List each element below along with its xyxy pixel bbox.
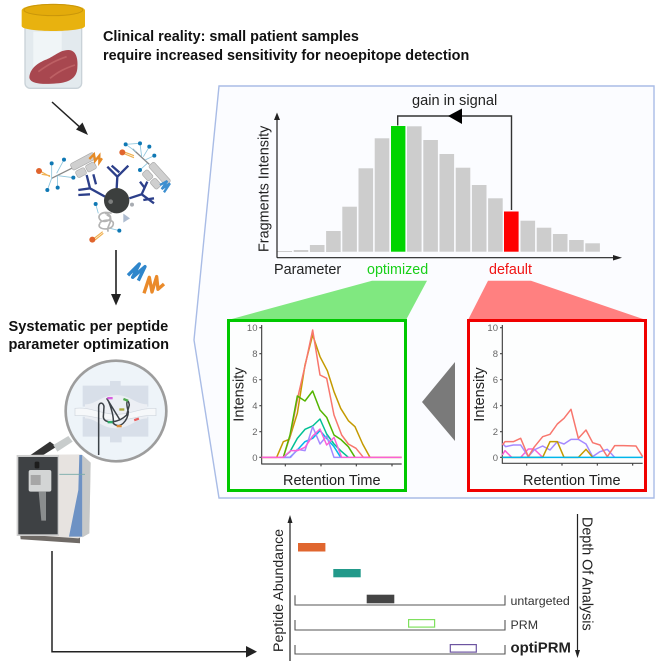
label default: default (489, 262, 532, 278)
peptide bar light green outline (409, 620, 435, 627)
icon: specimen jar with tissue (22, 4, 85, 88)
icon: magnifier with ion trap (66, 361, 166, 461)
peptide bar teal (333, 569, 361, 577)
abundance axis (288, 515, 292, 661)
label optiPRM: optiPRM (510, 640, 571, 656)
axis title: intensity: Intensity (472, 367, 488, 422)
arrow: beads to optimization (111, 250, 121, 306)
heading: clinical reality: require increased sensitivity for neoepitope detection (103, 48, 469, 64)
arrow: default to optimized comparison (422, 362, 455, 441)
heading: systematic optimization (8, 319, 169, 353)
optimized bar (391, 126, 405, 252)
peptide bar purple outline (450, 645, 476, 652)
panel: default chromatogram: 2 (493, 427, 498, 438)
label optimized: optimized (367, 262, 428, 278)
peptide bar dark (367, 595, 394, 603)
panel: default chromatogram: 8 (493, 349, 498, 360)
arrow: gain in signal (398, 108, 512, 210)
line chart: default traces (500, 325, 643, 466)
panel: optimized chromatogram: 10 (247, 323, 258, 334)
line chart: optimized traces (259, 325, 402, 466)
panel: optimization background (194, 86, 654, 498)
chart axes (274, 112, 622, 260)
bracket: untargeted (295, 595, 505, 605)
panel: optimized chromatogram: 2 (252, 427, 258, 438)
zoom wedge: optimized (228, 281, 427, 320)
bar chart: fragment intensity vs parameter (256, 93, 622, 278)
panel: default chromatogram (468, 320, 646, 490)
panel: default chromatogram: 10 (487, 323, 498, 334)
x axis title: Parameter (274, 262, 341, 278)
default bar (504, 212, 519, 252)
zoom wedge: default (468, 281, 646, 320)
panel: optimized chromatogram: 8 (252, 349, 258, 360)
depth axis (575, 514, 580, 658)
panel: optimized chromatogram: 0 (252, 453, 258, 464)
heading: systematic optimization: Systematic per peptide (8, 319, 168, 335)
axis title: retention time: Retention Time (523, 473, 621, 489)
label PRM: PRM (510, 618, 538, 632)
panel: optimized chromatogram (228, 320, 406, 490)
heading: clinical reality (103, 29, 469, 64)
axis title: intensity: Intensity (232, 367, 248, 422)
y axis title: Fragments Intensity (256, 125, 272, 252)
axis title: peptide abundance: Peptide Abundance (271, 529, 287, 652)
panel: optimized chromatogram: 4 (252, 401, 258, 412)
panel: default chromatogram: 6 (493, 375, 498, 386)
axis title: retention time: Retention Time (283, 473, 381, 489)
heading: systematic optimization: parameter optimization (8, 337, 169, 353)
chart: peptide abundance coverage (271, 514, 594, 661)
icon: peptides (128, 264, 164, 293)
heading: clinical reality: Clinical reality: small patient samples (103, 29, 359, 45)
panel: default chromatogram: 0 (493, 453, 498, 464)
bracket: optiPRM (295, 645, 505, 654)
axis title: depth of analysis: Depth Of Analysis (578, 517, 594, 631)
arrow: jar to beads (52, 102, 88, 135)
panel: optimized chromatogram: 6 (252, 375, 258, 386)
label gain in signal: gain in signal (412, 93, 497, 109)
panel: default chromatogram: 4 (493, 401, 498, 412)
grey parameter bars (278, 126, 600, 252)
label untargeted: untargeted (510, 594, 570, 608)
peptide bar orange (298, 543, 325, 552)
bracket: PRM (295, 620, 505, 630)
icon: mass spectrometer (17, 436, 91, 543)
icon: antibody bead enrichment (36, 141, 171, 243)
arrow: mass spectrometer to depth chart (52, 551, 257, 658)
